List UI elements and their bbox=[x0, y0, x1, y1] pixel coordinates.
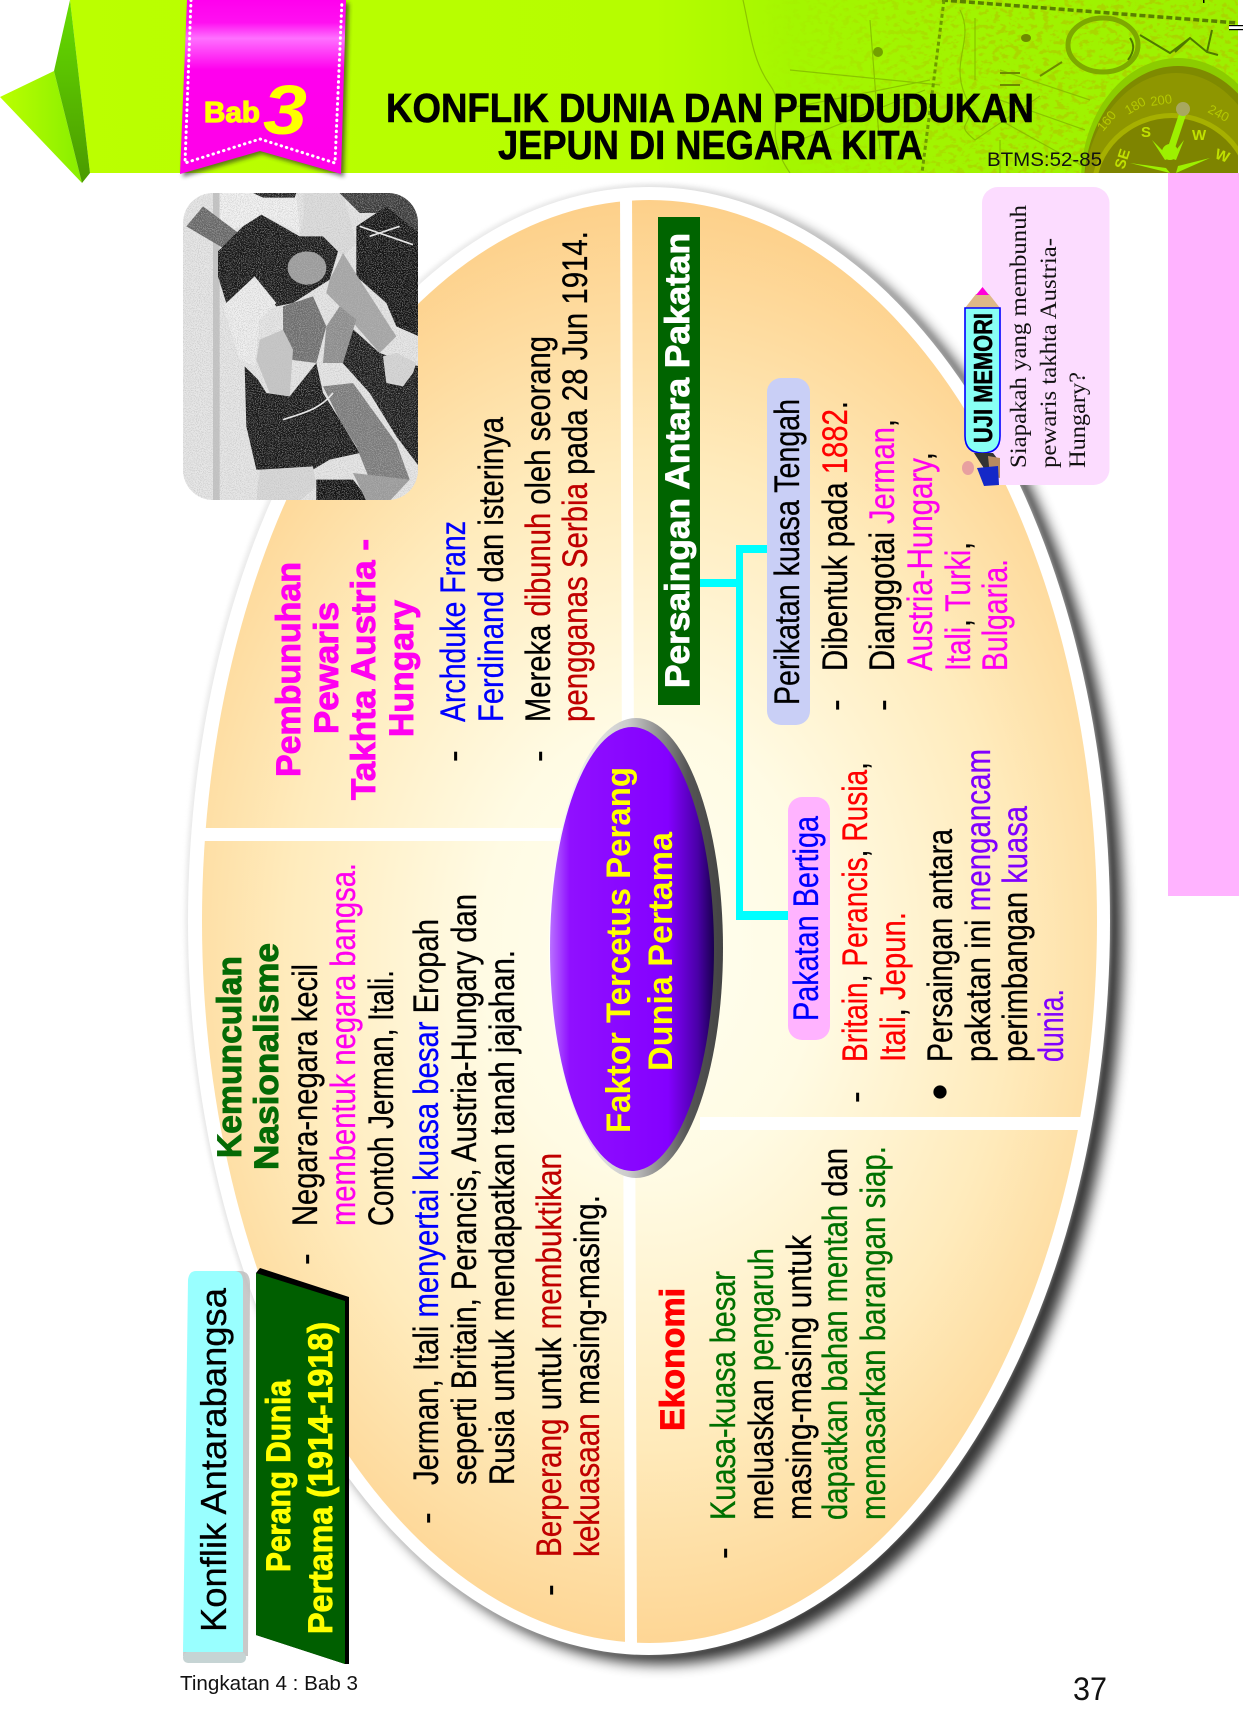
section: Kemunculan Nasionalisme bbox=[211, 863, 607, 1596]
body text: pengganas Serbia pada 28 Jun 1914. bbox=[556, 231, 595, 722]
Perikatan details: - bbox=[863, 699, 902, 711]
callout: Uji Memori question: Siapakah yang membunuh bbox=[1006, 204, 1031, 468]
title: JEPUN DI NEGARA KITA bbox=[498, 122, 923, 168]
heading bbox=[270, 539, 421, 800]
heading: Pewaris bbox=[308, 602, 346, 734]
panel: Perang Dunia Pertama: Pertama (1914-1918) bbox=[302, 1322, 340, 1634]
body text bbox=[434, 231, 595, 762]
heading box: Persaingan Antara Pakatan bbox=[659, 233, 697, 688]
body text: Jerman, Itali menyertai kuasa besar Eropah bbox=[407, 919, 446, 1485]
body text: - bbox=[407, 1512, 446, 1524]
body text: seperti Britain, Perancis, Austria-Hungary dan bbox=[445, 894, 484, 1485]
map decoration with compass: 200 bbox=[1149, 91, 1173, 109]
title bbox=[386, 85, 1034, 168]
photo: assassination illustration bbox=[183, 193, 419, 501]
Perikatan details bbox=[816, 401, 1015, 711]
map decoration with compass: W bbox=[1213, 146, 1233, 167]
label: Konflik Antarabangsa bbox=[183, 1271, 250, 1663]
body text: - bbox=[519, 750, 558, 762]
footer: chapter label: Tingkatan 4 : Bab 3 bbox=[180, 1673, 358, 1695]
folded corner arrow bbox=[0, 0, 90, 183]
corner marks bbox=[1203, 0, 1243, 30]
connector lines bbox=[700, 545, 789, 920]
map decoration with compass: S bbox=[1141, 124, 1151, 141]
body text: Mereka dibunuh oleh seorang bbox=[519, 336, 558, 722]
Pakatan details: Britain, Perancis, Rusia, bbox=[836, 762, 875, 1062]
callout: Uji Memori question: Hungary? bbox=[1065, 372, 1090, 468]
callout: Uji Memori question: pewaris takhta Austria- bbox=[1036, 238, 1061, 468]
body text: memasarkan barangan siap. bbox=[854, 1146, 893, 1520]
central oval title: Faktor Tercetus Perang bbox=[600, 767, 638, 1133]
Pakatan details: Itali, Jepun. bbox=[874, 912, 913, 1062]
body text: Negara-negara kecil bbox=[286, 964, 325, 1226]
icon: student bbox=[962, 453, 1000, 486]
panel: Perang Dunia Pertama: Perang Dunia bbox=[260, 1379, 298, 1572]
title: KONFLIK DUNIA DAN PENDUDUKAN bbox=[386, 85, 1034, 131]
heading: Hungary bbox=[383, 600, 421, 737]
section: Pembunuhan Pewaris bbox=[270, 231, 595, 800]
body text: - bbox=[434, 750, 473, 762]
label: Konflik Antarabangsa: Konflik Antarabangsa bbox=[193, 1287, 234, 1632]
body text: Ferdinand dan isterinya bbox=[472, 417, 511, 722]
body text: membentuk negara bangsa. bbox=[324, 863, 363, 1226]
Perikatan details: Dibentuk pada 1882. bbox=[816, 401, 855, 671]
central oval title: Dunia Pertama bbox=[642, 831, 680, 1071]
Perikatan details: Austria-Hungary, bbox=[901, 452, 940, 671]
Pakatan details bbox=[836, 749, 1071, 1103]
Perikatan details: Itali, Turki, bbox=[939, 542, 978, 671]
map decoration with compass: SE bbox=[1112, 147, 1134, 171]
map decoration with compass: 240 bbox=[1206, 101, 1232, 125]
heading: Ekonomi bbox=[654, 1288, 692, 1431]
body text: Archduke Franz bbox=[434, 521, 473, 722]
section: Persaingan Antara Pakatan bbox=[658, 217, 1071, 1103]
Perikatan details: Dianggotai Jerman, bbox=[863, 419, 902, 671]
map decoration with compass: W bbox=[1192, 127, 1207, 144]
Perikatan kuasa Tengah label: Perikatan kuasa Tengah bbox=[768, 399, 807, 705]
ribbon: Bab 3: Bab bbox=[204, 97, 260, 129]
Perikatan details: Bulgaria. bbox=[976, 559, 1015, 671]
page reference: BTMS:52-85 bbox=[987, 149, 1102, 171]
ribbon: Bab 3: 3 bbox=[263, 71, 307, 149]
map decoration with compass: 160 bbox=[1094, 108, 1119, 134]
icon: pencil label: UJI MEMORI bbox=[968, 313, 998, 443]
panel: Perang Dunia Pertama bbox=[256, 1268, 349, 1664]
body text: - bbox=[286, 1253, 325, 1265]
heading: Pembunuhan bbox=[270, 562, 308, 777]
body text: dapatkan bahan mentah dan bbox=[816, 1148, 855, 1520]
Perikatan details: - bbox=[816, 699, 855, 711]
side strip bbox=[1168, 173, 1239, 896]
body text: Rusia untuk mendapatkan tanah jajahan. bbox=[483, 950, 522, 1485]
section: Ekonomi bbox=[654, 1146, 893, 1559]
Pakatan details: - bbox=[836, 1091, 875, 1103]
ribbon: Bab 3 bbox=[180, 0, 349, 177]
body text: Contoh Jerman, Itali. bbox=[362, 970, 401, 1226]
heading: Nasionalisme bbox=[248, 943, 286, 1170]
Pakatan details: Persaingan antara bbox=[921, 829, 960, 1062]
Pakatan details: perimbangan kuasa bbox=[996, 806, 1035, 1062]
central oval title bbox=[600, 767, 680, 1133]
page number: 37 bbox=[1073, 1671, 1107, 1707]
Pakatan details: pakatan ini mengancam bbox=[959, 749, 998, 1062]
ellipse background bbox=[185, 184, 1123, 1664]
body text: - bbox=[530, 1584, 569, 1596]
body text: kekuasaan masing-masing. bbox=[568, 1195, 607, 1557]
body text bbox=[704, 1146, 893, 1559]
map decoration with compass bbox=[742, 0, 1238, 173]
central oval bbox=[549, 718, 723, 1178]
body text: masing-masing untuk bbox=[780, 1235, 819, 1520]
body text: Berperang untuk membuktikan bbox=[530, 1153, 569, 1557]
heading bbox=[211, 943, 286, 1170]
map decoration with compass: 180 bbox=[1122, 94, 1148, 118]
body text: meluaskan pengaruh bbox=[742, 1248, 781, 1520]
header band bbox=[70, 0, 1238, 173]
callout: Uji Memori question bbox=[982, 187, 1110, 485]
body text: Kuasa-kuasa besar bbox=[704, 1271, 743, 1520]
body text bbox=[286, 863, 607, 1596]
Pakatan Bertiga label: Pakatan Bertiga bbox=[787, 816, 826, 1021]
body text: - bbox=[704, 1547, 743, 1559]
Pakatan details: dunia. bbox=[1032, 989, 1071, 1062]
heading: Kemunculan bbox=[211, 956, 249, 1158]
heading: Takhta Austria - bbox=[345, 539, 383, 800]
